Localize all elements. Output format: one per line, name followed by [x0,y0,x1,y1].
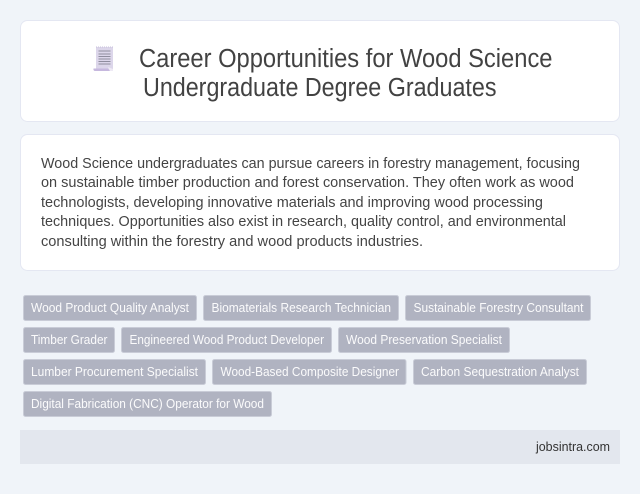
tag: Lumber Procurement Specialist [24,360,206,384]
tag: Carbon Sequestration Analyst: Carbon Sequestration Analyst [421,364,579,379]
tag: Carbon Sequestration Analyst [414,360,586,384]
icon: document scroll [93,47,113,71]
title: Career Opportunities for Wood Science [139,45,552,73]
footer: jobsintra.com [535,439,610,454]
panel: summary text: Wood Science undergraduates can pursue careers in forestry management, focusing [41,155,580,172]
tag: Timber Grader: Timber Grader [31,332,108,347]
tag: Digital Fabrication (CNC) Operator for Wood: Digital Fabrication (CNC) Operator for Wood [31,396,264,411]
panel: header [20,20,620,122]
tag: Sustainable Forestry Consultant [406,296,590,320]
panel: career tags [24,296,590,416]
panel: summary text: technologists, developing innovative materials and improving wood processing [41,194,543,211]
panel: summary text: techniques. Opportunities also exist in research, quality control, and environmental [41,213,566,230]
tag: Wood Product Quality Analyst: Wood Product Quality Analyst [31,300,189,315]
panel: summary text: on sustainable timber production and forest conservation. They often work as wood [41,174,574,191]
footer [20,430,620,464]
tag: Lumber Procurement Specialist: Lumber Procurement Specialist [31,364,198,379]
title [139,45,552,102]
tag: Wood-Based Composite Designer [212,360,406,384]
tag: Engineered Wood Product Developer [122,328,332,352]
tag: Digital Fabrication (CNC) Operator for Wood [24,392,272,416]
tag: Wood Preservation Specialist [338,328,510,352]
tag: Biomaterials Research Technician: Biomaterials Research Technician [212,300,391,315]
panel: summary text [20,134,620,270]
tag: Sustainable Forestry Consultant: Sustainable Forestry Consultant [414,300,584,315]
tag: Biomaterials Research Technician [204,296,398,320]
tag: Engineered Wood Product Developer: Engineered Wood Product Developer [130,332,325,347]
tag: Wood-Based Composite Designer: Wood-Based Composite Designer [220,364,400,379]
tag: Timber Grader [24,328,114,352]
tag: Wood Product Quality Analyst [24,296,196,320]
panel: summary text: consulting within the forestry and wood products industries. [41,233,423,250]
title: Undergraduate Degree Graduates [143,74,496,102]
tag: Wood Preservation Specialist: Wood Preservation Specialist [346,332,502,347]
